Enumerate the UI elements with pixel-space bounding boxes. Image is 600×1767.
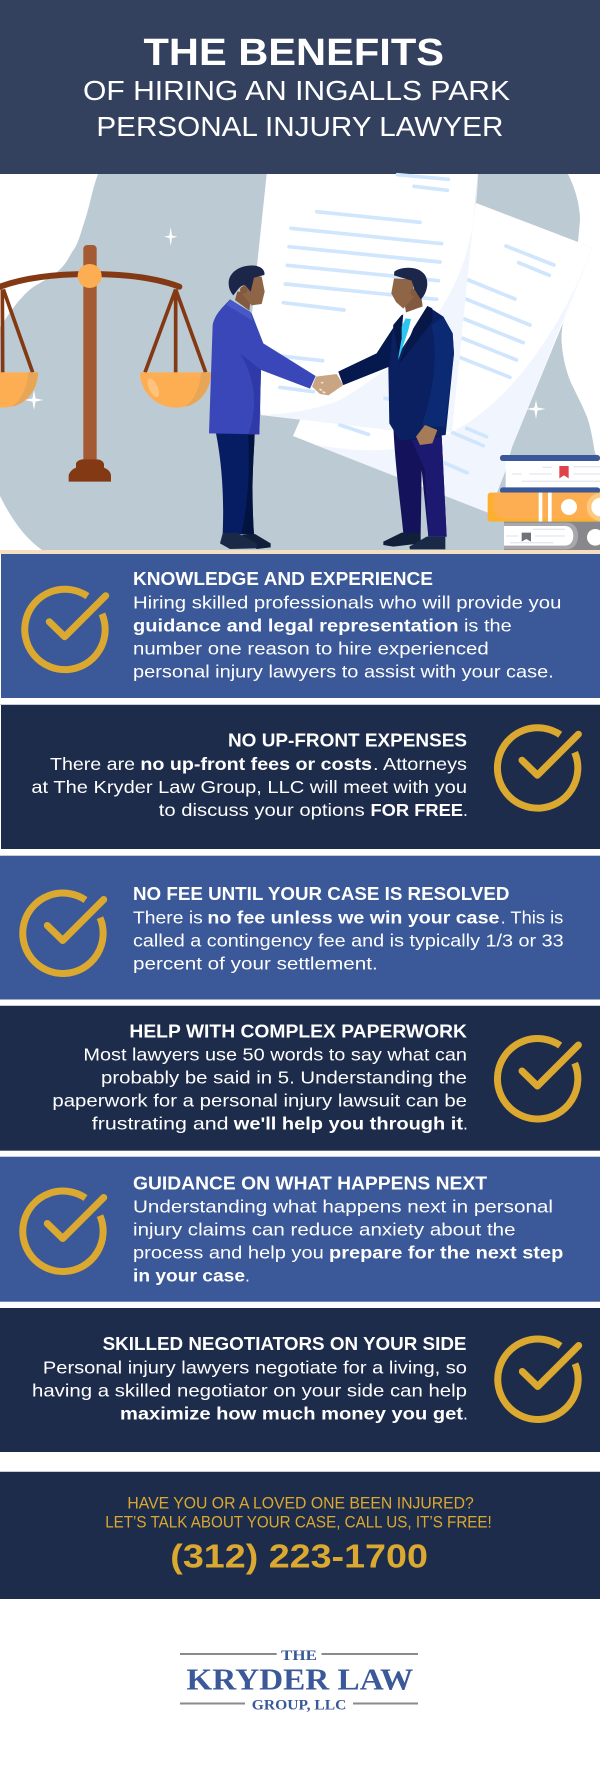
body text bbox=[52, 1044, 468, 1133]
body text: to discuss your options bbox=[159, 800, 365, 820]
body text: is the bbox=[464, 615, 512, 635]
sparkles bbox=[25, 227, 546, 419]
panel: no fee until resolved bbox=[0, 856, 600, 1000]
body text bbox=[133, 1196, 563, 1285]
call to action line 2: LET’S TALK ABOUT YOUR CASE, CALL US, IT’S FREE! bbox=[105, 1514, 492, 1532]
body text: Most lawyers use 50 words to say what can bbox=[83, 1044, 467, 1064]
front document bbox=[252, 174, 478, 473]
body text: Hiring skilled professionals who will provide you bbox=[133, 592, 561, 612]
body text: . Attorneys bbox=[373, 754, 467, 774]
icon: check mark bbox=[497, 728, 578, 808]
body text: . This is bbox=[501, 907, 564, 927]
icon: handshake bbox=[312, 374, 343, 395]
heading: NO FEE UNTIL YOUR CASE IS RESOLVED bbox=[133, 884, 509, 904]
body text: . bbox=[463, 1113, 468, 1133]
back document bbox=[293, 203, 592, 513]
body text: no up-front fees or costs bbox=[140, 754, 372, 774]
body text: frustrating and bbox=[92, 1113, 228, 1133]
icon: check mark bbox=[23, 1191, 104, 1271]
heading: NO UP-FRONT EXPENSES bbox=[228, 731, 467, 751]
icon: check mark bbox=[498, 1339, 579, 1419]
heading: KNOWLEDGE AND EXPERIENCE bbox=[133, 569, 433, 589]
body text: in your case bbox=[133, 1265, 245, 1285]
body text: we'll help you through it bbox=[233, 1113, 463, 1133]
panel: call to action bbox=[0, 1472, 600, 1599]
body text: Understanding what happens next in personal bbox=[133, 1196, 553, 1216]
body text: called a contingency fee and is typically 1/3 or 33 bbox=[133, 930, 564, 950]
body text: paperwork for a personal injury lawsuit can be bbox=[52, 1090, 467, 1110]
body text: process and help you bbox=[133, 1242, 324, 1262]
body text: having a skilled negotiator on your side can help bbox=[32, 1380, 467, 1400]
call to action line 1: HAVE YOU OR A LOVED ONE BEEN INJURED? bbox=[127, 1495, 474, 1513]
body text: FOR FREE bbox=[370, 800, 463, 820]
illustration: handshake with scales, documents and books bbox=[0, 174, 600, 550]
icon: stack of books bbox=[488, 455, 600, 550]
subtitle line 2: PERSONAL INJURY LAWYER bbox=[96, 111, 503, 142]
heading: HELP WITH COMPLEX PAPERWORK bbox=[129, 1021, 467, 1041]
body text: no fee unless we win your case bbox=[207, 907, 500, 927]
icon: check mark bbox=[25, 589, 106, 670]
body text bbox=[133, 907, 564, 973]
panel: no up-front expenses bbox=[1, 705, 600, 849]
figure: man in blue jacket bbox=[209, 265, 316, 549]
body text bbox=[31, 754, 468, 820]
body text: prepare for the next step bbox=[329, 1242, 563, 1262]
subtitle line 1: OF HIRING AN INGALLS PARK bbox=[83, 75, 510, 106]
body text: Personal injury lawyers negotiate for a living, so bbox=[43, 1357, 467, 1377]
sparkle on pan bbox=[25, 391, 43, 409]
body text bbox=[133, 592, 561, 681]
panel: skilled negotiators bbox=[0, 1308, 600, 1452]
title: THE BENEFITS bbox=[144, 32, 444, 74]
phone number: (312) 223-1700 bbox=[170, 1537, 428, 1574]
body text: maximize how much money you get bbox=[120, 1403, 463, 1423]
header banner bbox=[0, 0, 600, 174]
body text: guidance and legal representation bbox=[133, 615, 458, 635]
body text: number one reason to hire experienced bbox=[133, 638, 489, 658]
icon: check mark bbox=[497, 1039, 578, 1119]
body text: . bbox=[245, 1265, 250, 1285]
body text: percent of your settlement. bbox=[133, 953, 378, 973]
body text: personal injury lawyers to assist with your case. bbox=[133, 661, 554, 681]
logo: The Kryder Law Group, LLC: GROUP, LLC bbox=[252, 1698, 346, 1714]
heading: GUIDANCE ON WHAT HAPPENS NEXT bbox=[133, 1173, 487, 1193]
background blob bbox=[0, 174, 600, 550]
body text: probably be said in 5. Understanding the bbox=[101, 1067, 467, 1087]
panel: guidance on what happens next bbox=[0, 1157, 600, 1302]
body text: at The Kryder Law Group, LLC will meet with you bbox=[31, 777, 467, 797]
body text: . bbox=[463, 1403, 468, 1423]
heading: SKILLED NEGOTIATORS ON YOUR SIDE bbox=[103, 1334, 466, 1354]
floor stripe bbox=[0, 550, 600, 554]
icon: check mark bbox=[23, 893, 104, 973]
logo: The Kryder Law Group, LLC: THE bbox=[281, 1648, 317, 1664]
panel: help with complex paperwork bbox=[0, 1006, 600, 1151]
body text: . bbox=[463, 800, 468, 820]
logo: The Kryder Law Group, LLC: KRYDER LAW bbox=[186, 1661, 413, 1696]
figure: man in navy suit bbox=[338, 268, 454, 549]
body text bbox=[32, 1357, 468, 1423]
logo: The Kryder Law Group, LLC bbox=[180, 1648, 418, 1714]
panel: knowledge and experience bbox=[1, 554, 600, 698]
body text: injury claims can reduce anxiety about the bbox=[133, 1219, 516, 1239]
icon: scales of justice bbox=[0, 245, 211, 482]
body text: There is bbox=[133, 907, 203, 927]
body text: There are bbox=[50, 754, 135, 774]
